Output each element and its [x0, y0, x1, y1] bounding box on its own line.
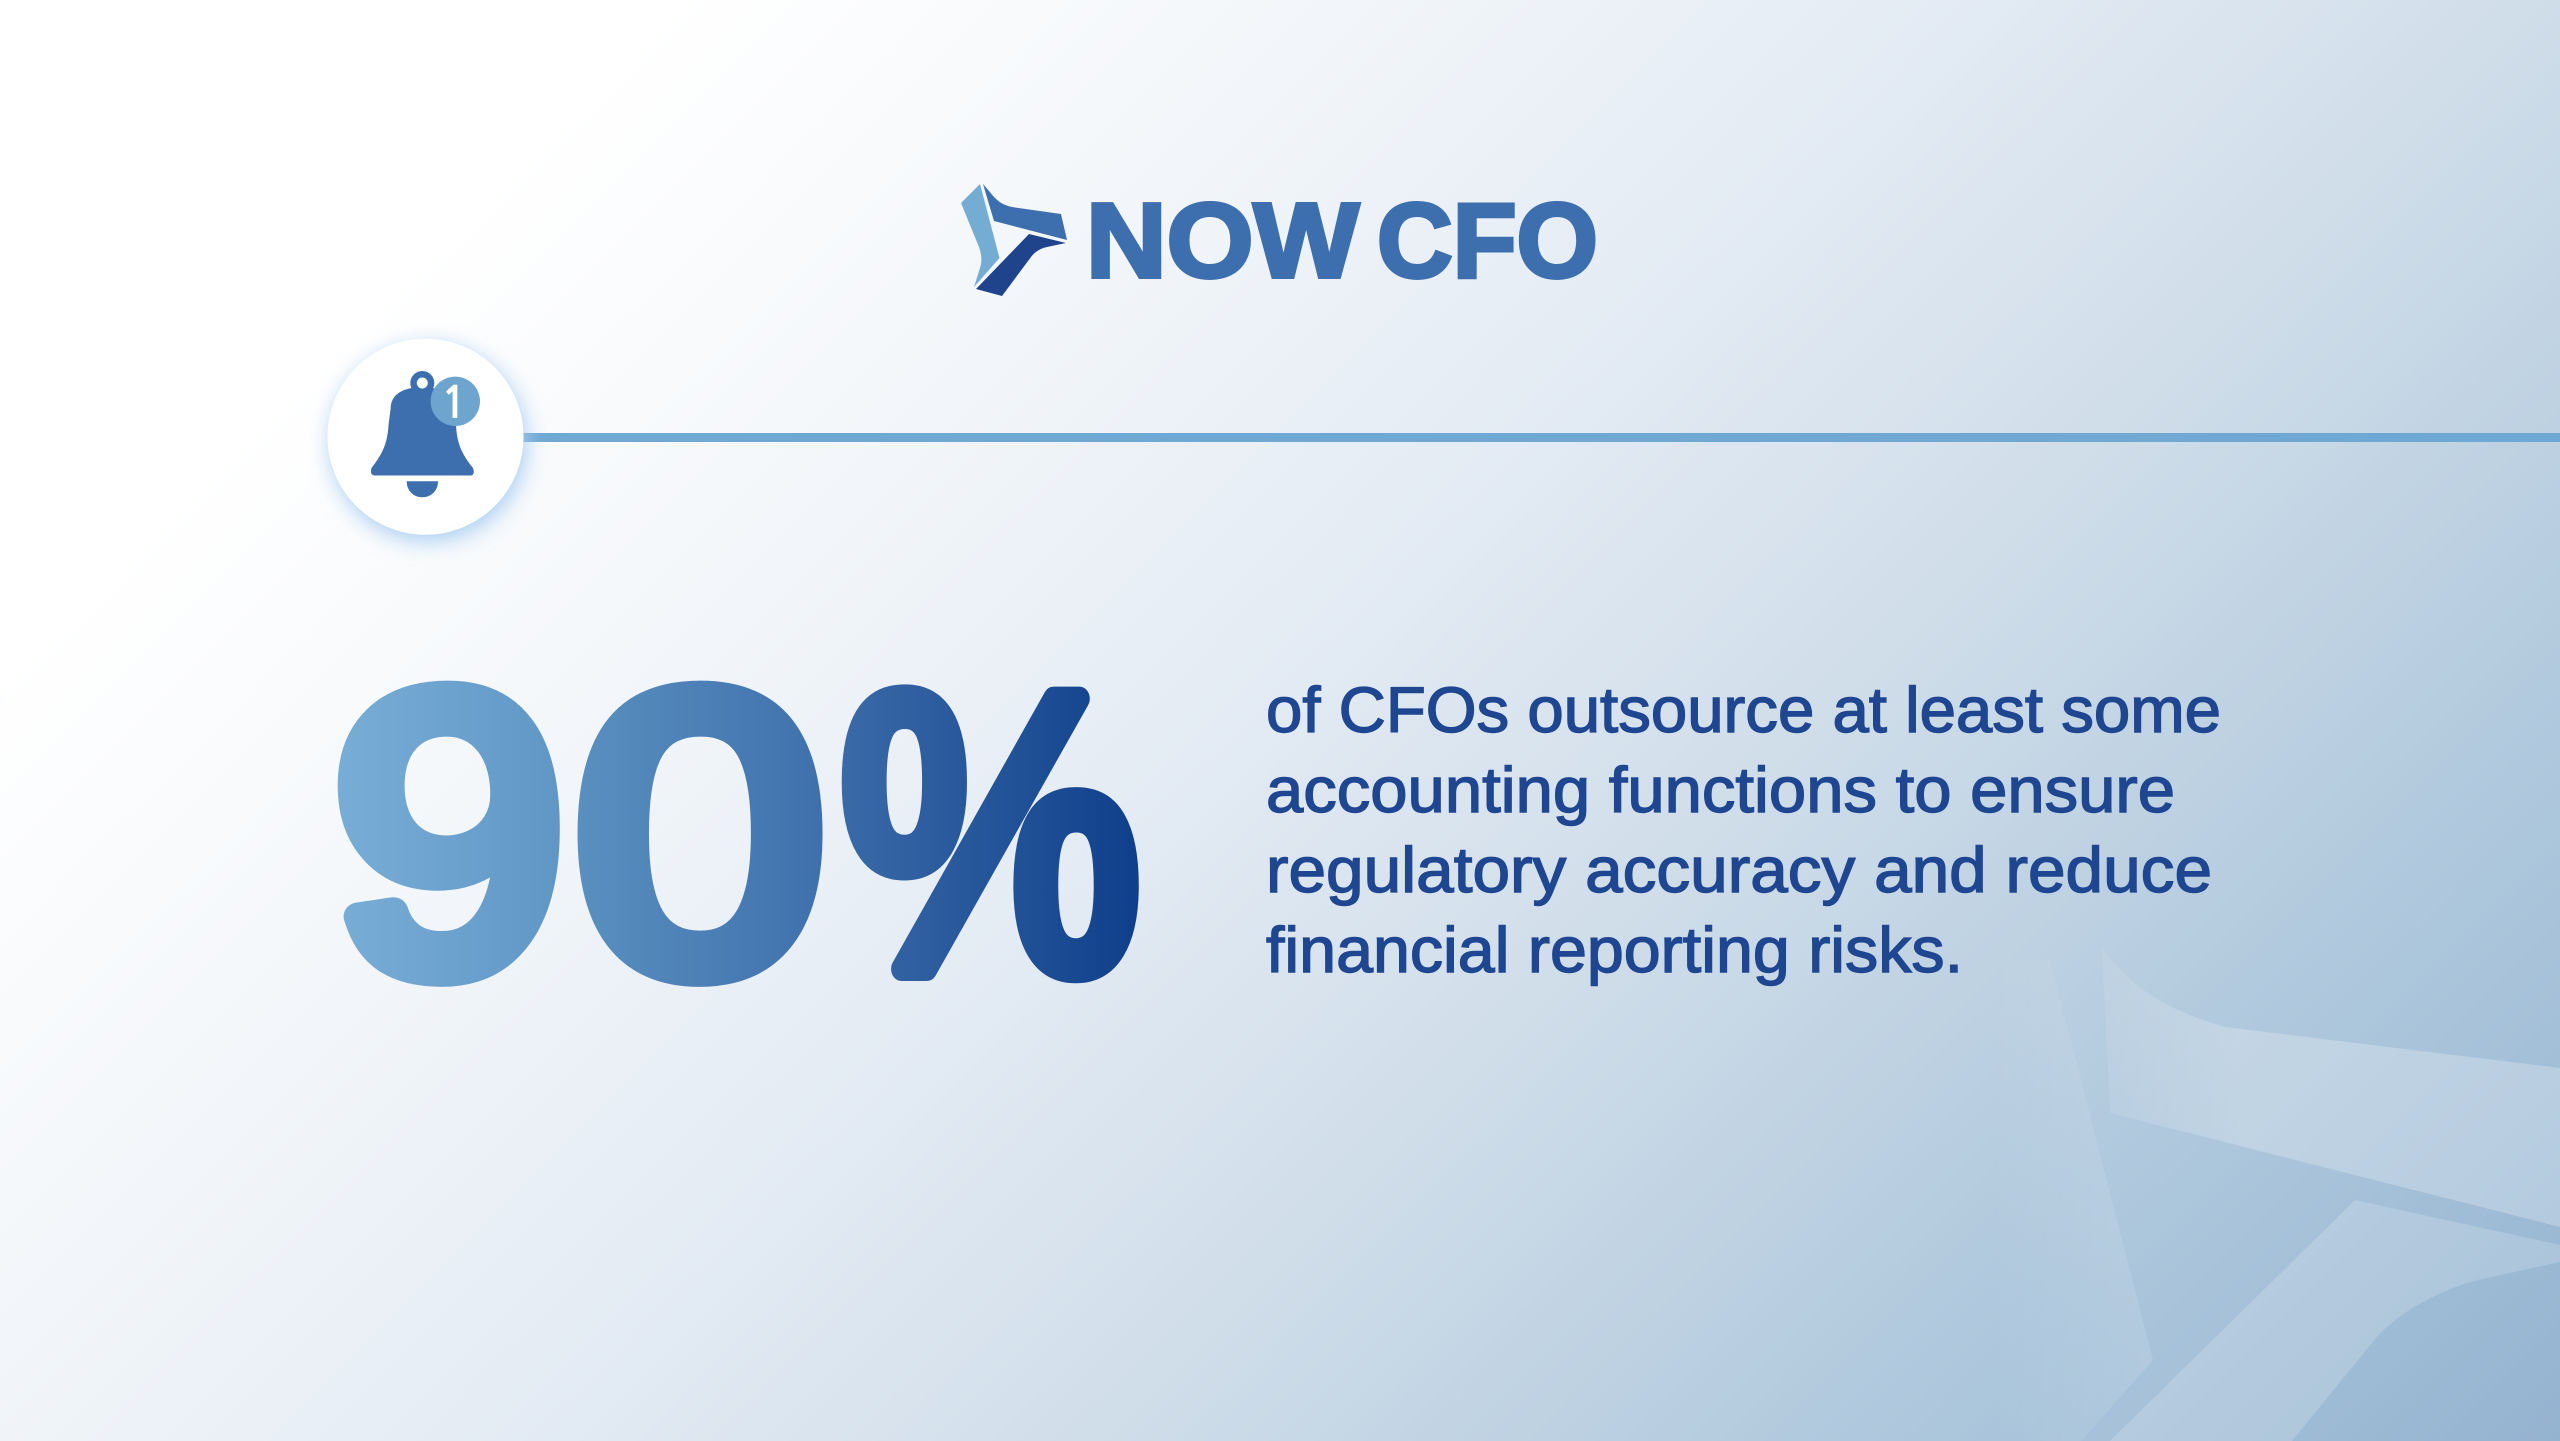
logo wordmark: CFO: [1377, 182, 1598, 300]
statistic description: financial reporting risks.: [1266, 914, 1963, 986]
statistic description: [1266, 674, 2221, 986]
icon: logo mark: [961, 184, 1067, 296]
statistic description: of CFOs outsource at least some: [1266, 674, 2221, 746]
big statistic: 90%: [333, 613, 1141, 1053]
big statistic: 90%: %: [840, 613, 1141, 1053]
watermark: large logo mark: [1990, 948, 2560, 1441]
logo wordmark: NOW: [1086, 182, 1359, 300]
big statistic: 90%: 0: [576, 614, 824, 1053]
logo wordmark: [1086, 182, 1598, 300]
logo: NOW CFO: [961, 182, 1598, 300]
statistic description: accounting functions to ensure: [1266, 754, 2175, 826]
icon: notification bell in circle: [328, 339, 526, 541]
icon: notification bell in circle: 1: [441, 381, 467, 425]
divider line: [520, 433, 2560, 442]
big statistic: 90%: 9: [333, 613, 565, 1052]
statistic description: regulatory accuracy and reduce: [1266, 834, 2212, 906]
